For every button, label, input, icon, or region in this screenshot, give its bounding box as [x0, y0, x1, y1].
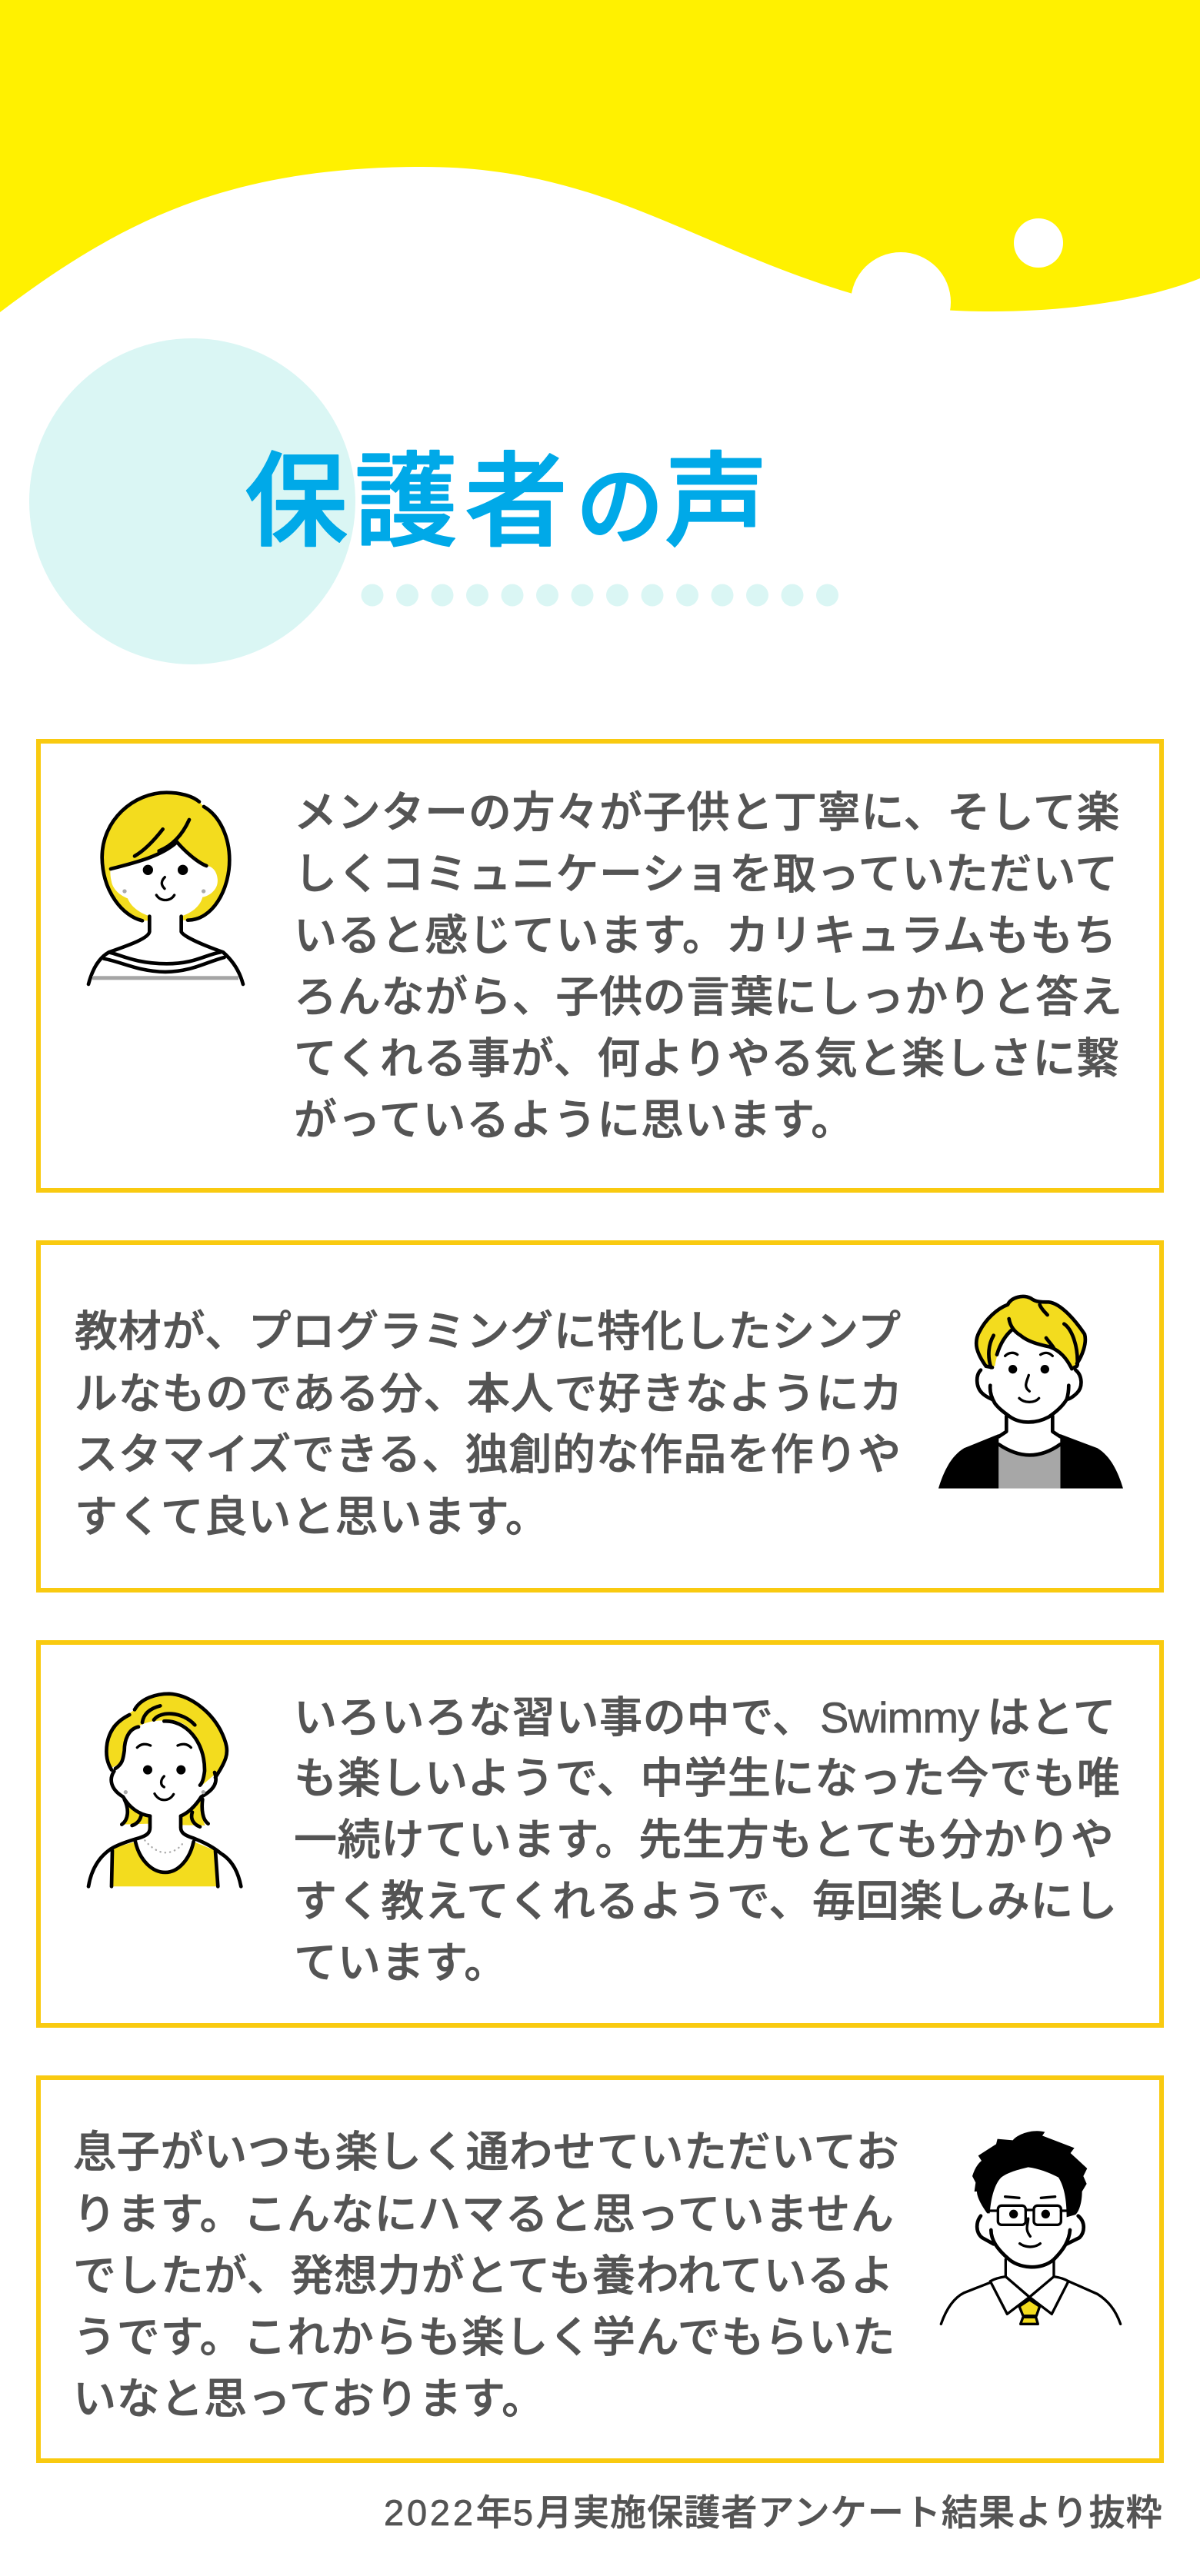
title: 保護者: [245, 445, 575, 560]
comment text 1: てくれる事が、何よりやる気と楽しさに繋: [294, 1034, 1120, 1083]
comment text 2: すくて良いと思います。: [75, 1493, 549, 1541]
icon: woman with bob hair: [88, 793, 243, 984]
comment text 3: も楽しいようで、中学生になった今でも唯: [294, 1754, 1120, 1802]
panel: voice 2: [38, 1243, 1162, 1590]
comment text 1: いると感じています。カリキュラムももち: [294, 911, 1117, 960]
comment text 1: ろんながら、子供の言葉にしっかりと答え: [294, 973, 1123, 1021]
comment text 2: ルなものである分、本人で好きなようにカ: [75, 1370, 903, 1418]
comment text 3: [294, 1693, 1120, 1987]
icon: woman with wavy hair and tank top: [88, 1694, 241, 1886]
icon: man with glasses and tie: [941, 2131, 1121, 2324]
comment text 3: はとて: [987, 1693, 1116, 1742]
title: [245, 445, 768, 560]
comment text 4: うです。これからも楽しく学んでもらいた: [73, 2313, 895, 2361]
footnote: 2022年5月実施保護者アンケート結果より抜粋: [384, 2492, 1163, 2533]
comment text 2: 教材が、プログラミングに特化したシンプ: [75, 1307, 902, 1356]
comment text 1: メンターの方々が子供と丁寧に、そして楽: [294, 788, 1120, 837]
dotted line under title: [362, 584, 838, 606]
comment text 1: しくコミュニケーショを取っていただいて: [294, 850, 1118, 898]
title: の: [576, 459, 664, 557]
title: 声: [665, 445, 768, 560]
comment text 2: [75, 1307, 903, 1541]
comment text 3: ています。: [294, 1939, 508, 1987]
comment text 3: Swimmy: [820, 1693, 980, 1742]
comment text 2: スタマイズできる、独創的な作品を作りや: [75, 1430, 902, 1479]
comment text 4: [73, 2128, 899, 2423]
comment text 1: [294, 788, 1123, 1144]
panel: voice 1: [38, 741, 1162, 1190]
panel: voice 3: [38, 1642, 1162, 2025]
decorative teal circle behind title: [29, 338, 355, 664]
comment text 3: すく教えてくれるようで、毎回楽しみにし: [294, 1877, 1118, 1925]
comment text 4: いなと思っております。: [73, 2375, 545, 2423]
comment text 4: 息子がいつも楽しく通わせていただいてお: [73, 2128, 899, 2176]
comment text 1: がっているように思います。: [294, 1096, 855, 1144]
comment text 4: ります。こんなにハマると思っていません: [73, 2190, 895, 2238]
comment text 3: いろいろな習い事の中で、: [294, 1693, 815, 1742]
icon: young man with yellow hair: [938, 1296, 1123, 1489]
comment text 4: でしたが、発想力がとても養われているよ: [73, 2252, 895, 2300]
panel: voice 4: [38, 2078, 1162, 2461]
comment text 3: 一続けています。先生方もとても分かりや: [294, 1816, 1114, 1864]
header: yellow wave with circles: [0, 0, 1200, 352]
